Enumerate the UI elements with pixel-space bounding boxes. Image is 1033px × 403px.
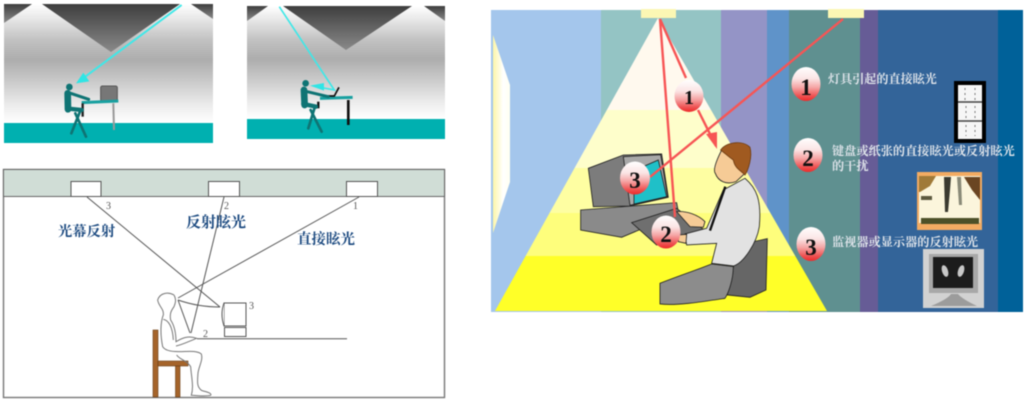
legend item 1: 灯具引起的直接眩光: [827, 71, 937, 86]
ray number labels: 3: [249, 301, 254, 312]
label: direct glare: 直接眩光: [297, 230, 355, 248]
red glare rays: [650, 19, 843, 217]
legend item 2: 键盘或纸张的直接眩光或反射眩光: [832, 143, 1015, 158]
ray number labels: 1: [353, 201, 358, 212]
ceiling band: [4, 170, 444, 196]
marker 2 on scene: [652, 216, 680, 248]
legend item 3: 3: [805, 235, 817, 260]
marker 1 on scene: [674, 80, 704, 112]
photo: monitor with reflected lights: [923, 249, 984, 308]
seated person outline: [158, 293, 211, 396]
legend item 1: [792, 67, 937, 101]
photo: glare on open book: [917, 172, 982, 230]
panel: glare types section diagram: [4, 170, 444, 398]
ceiling shadows: [247, 6, 445, 50]
legend item 3: [796, 227, 978, 261]
light cone: [490, 18, 830, 311]
legend item 1: 1: [800, 75, 812, 100]
window on left wall: [493, 35, 510, 233]
photo: glare on document: [954, 81, 986, 143]
ray number labels: [106, 201, 358, 340]
computer: [581, 154, 703, 245]
ray number labels: 3: [106, 201, 111, 212]
floor: [247, 119, 445, 139]
ceiling lights: [641, 9, 864, 18]
legend item 2: [794, 138, 1015, 173]
legend item 3: 监视器或显示器的反射眩光: [832, 234, 978, 249]
cyan glare arrow: [279, 7, 334, 91]
legend item 2: 2: [802, 146, 814, 171]
panel: reflected glare scene: [247, 6, 445, 139]
figure at desk with monitor: [66, 84, 118, 137]
seated man: [660, 143, 767, 304]
marker 3 on scene: 3: [629, 168, 641, 193]
wooden chair: [153, 330, 188, 397]
figure at desk with laptop: [302, 80, 353, 132]
label: reflected glare: 反射眩光: [186, 213, 246, 231]
marker 2 on scene: 2: [660, 222, 672, 247]
ceiling shadows: [4, 4, 213, 52]
wall colour columns: [491, 10, 1023, 312]
ceiling light fixtures: [71, 182, 378, 196]
label: screen reflection: 光幕反射: [58, 222, 116, 240]
cyan glare arrow: [76, 5, 182, 83]
arrowhead: [706, 132, 717, 149]
floor: [4, 123, 213, 143]
legend item 2: 的干扰: [832, 158, 869, 173]
glare rays: [87, 197, 359, 333]
ray number labels: 2: [224, 201, 229, 212]
desk: [197, 338, 347, 340]
monitor and keyboard: [222, 303, 246, 336]
marker 1 on scene: 1: [684, 87, 694, 109]
panel: office glare illustration: [490, 9, 1023, 312]
panel: direct glare scene: [4, 4, 213, 143]
ray number labels: 2: [203, 329, 208, 340]
marker 3 on scene: [620, 162, 650, 194]
